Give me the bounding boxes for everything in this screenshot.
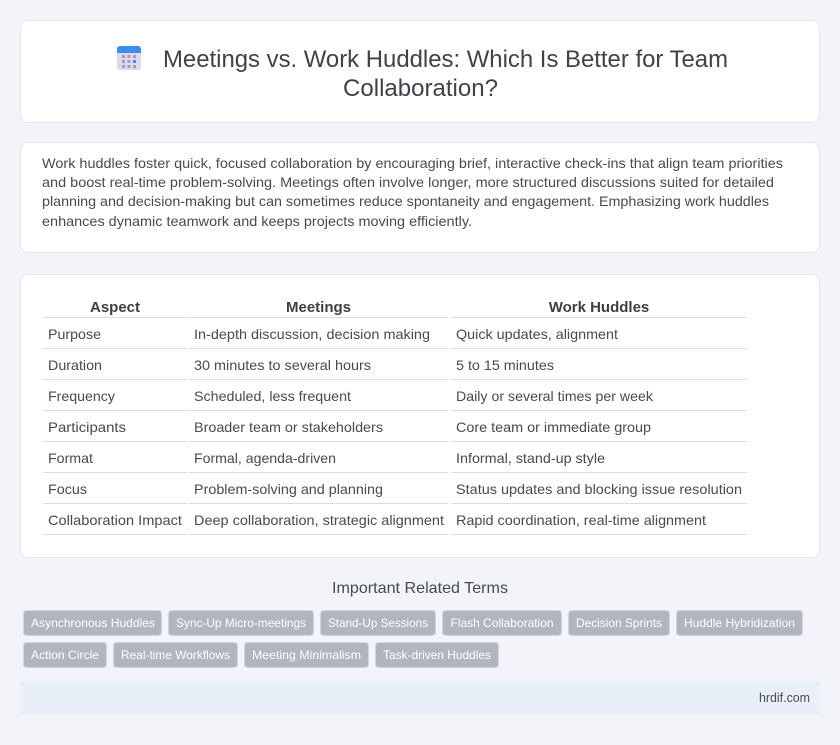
footer (20, 681, 820, 714)
table row: duration: 30 minutes to several hours (194, 357, 371, 373)
tag list: related terms: Task-driven Huddles (383, 648, 491, 662)
title: Collaboration? (343, 75, 498, 102)
panel: header (20, 20, 820, 122)
table row: purpose: Quick updates, alignment (456, 326, 618, 342)
table row: focus (48, 481, 742, 497)
table row: participants: Broader team or stakeholders (194, 419, 383, 435)
text block: introduction: and boost real-time problem-solving. Meetings often involve longer, more structured discussions suited for detailed (42, 174, 774, 190)
tag list: related terms (24, 610, 802, 668)
table row: purpose: In-depth discussion, decision making (194, 326, 430, 342)
table row: format: Formal, agenda-driven (194, 450, 336, 466)
table row: focus: Focus (48, 481, 87, 497)
tag list: related terms: Decision Sprints (576, 616, 662, 630)
tag list: related terms: Meeting Minimalism (252, 648, 361, 662)
table row: collaboration impact: Collaboration Impact (48, 512, 182, 528)
table row: collaboration impact: Rapid coordination, real-time alignment (456, 512, 706, 528)
text block: introduction: Work huddles foster quick, focused collaboration by encouraging brief, interactive check-ins that align team priorities (42, 155, 783, 171)
table row: duration: Duration (48, 357, 102, 373)
table row: format: Format (48, 450, 93, 466)
panel: introduction (20, 142, 820, 252)
table row: frequency: Daily or several times per week (456, 388, 654, 404)
table row: duration (48, 357, 554, 373)
tag list: related terms: Action Circle (31, 648, 99, 662)
table row: focus: Status updates and blocking issue resolution (456, 481, 742, 497)
table row: participants: Participants (48, 419, 126, 435)
panel: comparison table (20, 274, 820, 558)
table row: participants (48, 419, 651, 435)
table header: Aspect (90, 299, 140, 316)
table row: duration: 5 to 15 minutes (456, 357, 554, 373)
table row: collaboration impact: Deep collaboration, strategic alignment (194, 512, 444, 528)
heading: related terms: Important Related Terms (332, 580, 508, 597)
table row: frequency: Scheduled, less frequent (194, 388, 351, 404)
tag list: related terms: Stand-Up Sessions (328, 616, 428, 630)
table row: participants: Core team or immediate group (456, 419, 651, 435)
footer: hrdif.com (759, 690, 810, 705)
tag list: related terms: Flash Collaboration (450, 616, 554, 630)
table row: frequency (48, 388, 654, 404)
icon: calendar (117, 46, 141, 70)
table row: format: Informal, stand-up style (456, 450, 605, 466)
tag list: related terms: Asynchronous Huddles (31, 616, 155, 630)
tag list: related terms: Sync-Up Micro-meetings (176, 616, 306, 630)
text block: introduction (42, 155, 783, 229)
title (163, 46, 728, 102)
text block: introduction: planning and decision-making but can sometimes reduce spontaneity and engagement. Emphasizing work huddles (42, 193, 769, 209)
table row: purpose: Purpose (48, 326, 101, 342)
table header: Work Huddles (549, 299, 649, 316)
text block: introduction: enhances dynamic teamwork and keeps projects moving efficiently. (42, 213, 472, 229)
tag list: related terms: Huddle Hybridization (684, 616, 795, 630)
tag list: related terms: Real-time Workflows (121, 648, 230, 662)
table row: focus: Problem-solving and planning (194, 481, 383, 497)
title: Meetings vs. Work Huddles: Which Is Better for Team (163, 46, 728, 73)
table header (90, 299, 649, 316)
table row: collaboration impact (48, 512, 706, 528)
table row: frequency: Frequency (48, 388, 115, 404)
table row: format (48, 450, 605, 466)
table row: purpose (48, 326, 618, 342)
table header: Meetings (286, 299, 351, 316)
